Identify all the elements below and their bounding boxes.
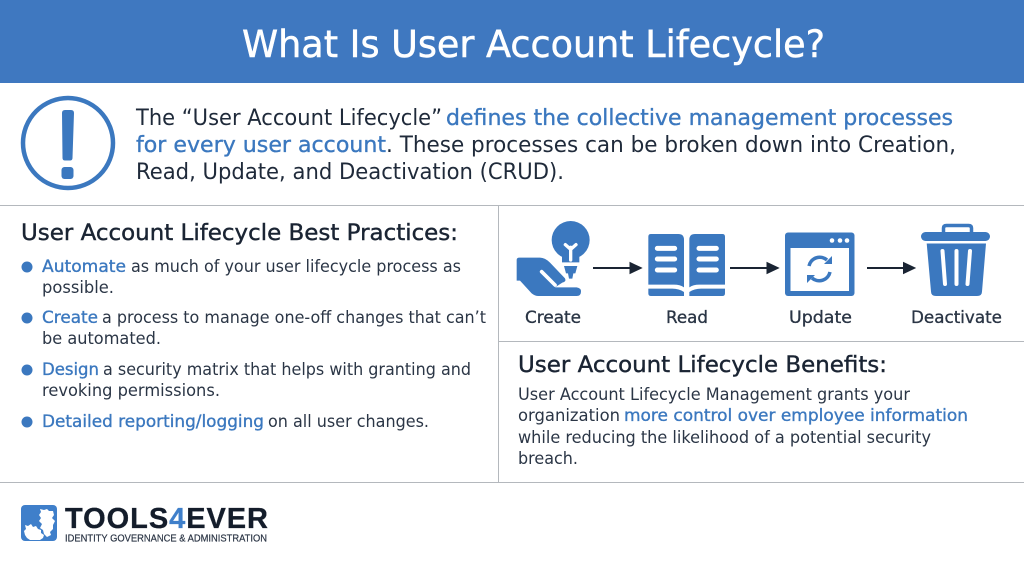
heading: best practices: User Account Lifecycle Best Practices: [21,221,458,246]
benefits text: more control over employee information [624,406,968,426]
arrow [867,262,915,274]
bullet: design [22,360,471,401]
intro text [135,106,956,185]
title banner [0,0,1024,83]
benefits text [518,385,968,469]
bullet: create: be automated. [42,329,161,349]
benefits text: breach. [518,449,578,469]
arrow [593,262,642,274]
labels: Create [525,308,581,328]
intro text: The “User Account Lifecycle” [135,106,442,131]
bullet: reporting: Detailed reporting/logging [42,412,264,432]
bullet: create: a process to manage one-off changes that can’t [102,308,486,328]
logo tagline: IDENTITY GOVERNANCE & ADMINISTRATION [65,532,267,544]
icon: update [785,232,854,296]
benefits text: organization [518,406,620,426]
intro text: defines the collective management processes [446,106,953,131]
title banner: What Is User Account Lifecycle? [242,23,825,66]
arrow [730,262,778,274]
bullet: create: Create [42,308,98,328]
icon: create [517,221,590,296]
icon: deactivate [921,226,990,296]
benefits text: while reducing the likelihood of a potential security [518,428,931,448]
bullet: automate: as much of your user lifecycle process as [131,257,461,277]
intro text: Read, Update, and Deactivation (CRUD). [136,160,564,185]
logo mark [21,505,57,541]
logo [21,503,268,544]
bullet: design: revoking permissions. [42,381,220,401]
labels: Read [666,308,708,328]
intro text: . These processes can be broken down into Creation, [386,133,956,158]
icon: exclamation mark [23,98,113,188]
panel: lifecycle diagram [517,221,1002,328]
icon: read [648,234,725,296]
panel: benefits [518,353,968,469]
bullet: automate: possible. [42,278,114,298]
bullet: automate [22,257,461,298]
bullet: create [22,308,486,349]
benefits text: User Account Lifecycle Management grants your [518,385,910,405]
bullet: reporting: on all user changes. [268,412,429,432]
logo wordmark: TOOLS4EVER [65,503,268,535]
bullet: automate: Automate [42,257,126,277]
labels [525,308,1002,328]
labels: Deactivate [911,308,1002,328]
labels: Update [789,308,852,328]
panel: best practices [21,221,486,432]
heading: benefits: User Account Lifecycle Benefits: [518,353,887,378]
bullet: design: a security matrix that helps with granting and [103,360,471,380]
intro text: for every user account [136,133,386,158]
bullet: reporting [22,412,429,432]
bullet: design: Design [42,360,99,380]
